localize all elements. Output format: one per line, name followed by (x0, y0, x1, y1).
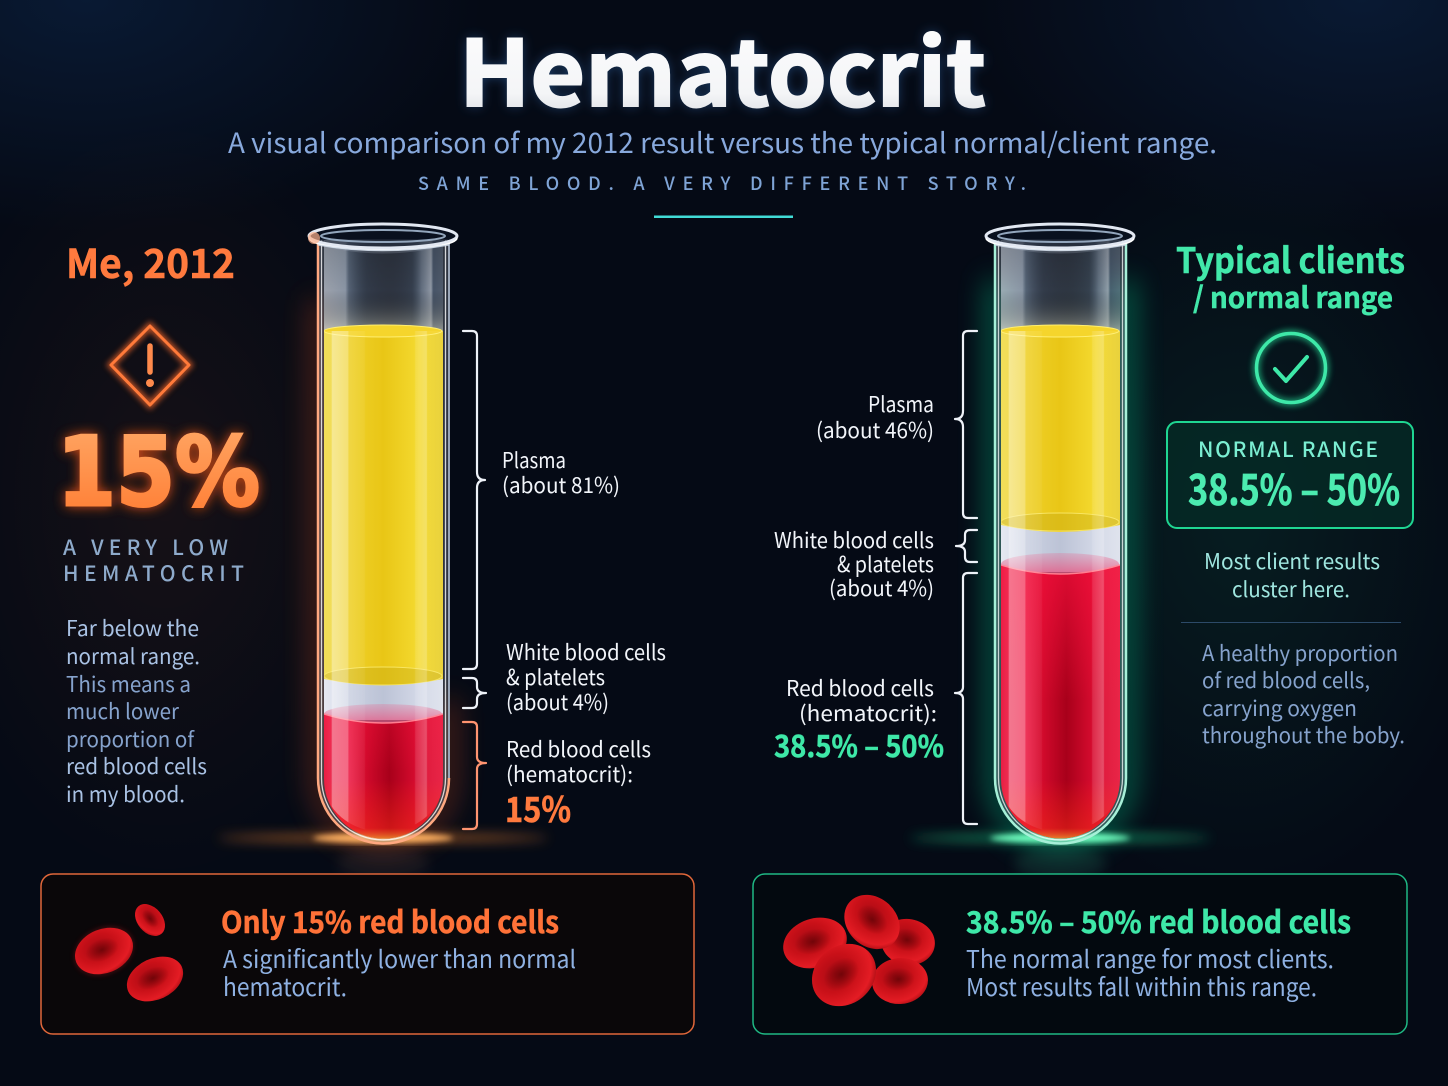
panel text: Most results fall within this range. (966, 969, 1317, 1004)
description: of red blood cells, (1202, 664, 1370, 695)
panel heading: Only 15% red blood cells (221, 898, 559, 942)
bracket: red cells (955, 573, 977, 824)
heading: typical clients: Typical clients (1176, 233, 1405, 284)
description: proportion of (66, 723, 195, 754)
label: red blood cells: Red blood cells (506, 733, 651, 764)
heading: typical clients: / normal range (1193, 275, 1393, 317)
bracket: red cells (463, 722, 486, 829)
label: red blood cells: (hematocrit): (799, 697, 937, 728)
glass interior (1001, 240, 1120, 332)
value: 15 percent: 15% (57, 418, 260, 528)
label: white blood cells (774, 524, 934, 603)
label: white blood cells: (about 4%) (506, 686, 609, 717)
label: white blood cells: White blood cells (506, 636, 666, 667)
label: red blood cells: (hematocrit): (506, 758, 633, 789)
tube rim (308, 224, 457, 254)
panel text: The normal range for most clients. (966, 941, 1334, 976)
bracket: plasma (955, 331, 977, 518)
label: red blood cells (774, 672, 944, 766)
description: A healthy proportion (1202, 637, 1398, 668)
liquid layers (318, 240, 449, 845)
description: throughout the boby. (1202, 719, 1405, 750)
label: white blood cells: White blood cells (774, 524, 934, 555)
panel: only 15 percent (41, 874, 694, 1034)
red cells layer (1001, 565, 1120, 845)
description (66, 612, 207, 809)
label: plasma: Plasma (502, 444, 566, 475)
label: plasma: Plasma (868, 388, 934, 419)
label: white blood cells: (about 4%) (829, 572, 934, 603)
panel text (223, 941, 576, 1004)
description (1202, 637, 1405, 750)
description: carrying oxygen (1202, 692, 1357, 723)
callout: normal range (1167, 422, 1413, 528)
heading: typical clients (1176, 233, 1405, 317)
plasma layer (324, 325, 443, 689)
icon: red blood cells (68, 898, 190, 1010)
icon: red blood cells (777, 884, 939, 1019)
title: Hematocrit (459, 1, 986, 133)
plasma layer (1001, 325, 1120, 535)
label: red blood cells: 38.5% – 50% (774, 722, 944, 766)
tube glow (218, 300, 548, 882)
caption: a very low hematocrit: HEMATOCRIT (63, 558, 244, 588)
heading: me 2012: Me, 2012 (66, 232, 235, 290)
tube rim (986, 224, 1134, 254)
title: Hematocrit (459, 1, 986, 133)
label: white blood cells: & platelets (506, 661, 605, 692)
label: red blood cells (505, 733, 651, 833)
accent line (654, 216, 793, 218)
callout value: 38.5% – 50% (1188, 457, 1400, 518)
bracket: white cells (463, 678, 486, 708)
panel text: A significantly lower than normal (223, 941, 576, 976)
tube glow (910, 280, 1210, 882)
icon: check circle (1256, 334, 1326, 402)
white cells layer (1001, 525, 1120, 575)
label: plasma: (about 46%) (816, 414, 934, 445)
description: red blood cells (66, 750, 207, 781)
label: plasma: (about 81%) (502, 469, 620, 500)
note: cluster here: cluster here. (1232, 573, 1350, 604)
glass highlights (1001, 331, 1120, 841)
glass wall (318, 240, 449, 844)
glass highlights (324, 331, 443, 841)
panel: me 2012 summary (57, 232, 260, 809)
caption: a very low hematocrit (63, 532, 244, 588)
callout label: NORMAL RANGE (1198, 434, 1378, 464)
panel text: hematocrit. (223, 969, 347, 1004)
red cells layer (324, 714, 443, 845)
label: plasma (502, 444, 620, 500)
tagline: SAME BLOOD. A VERY DIFFERENT STORY. (418, 170, 1026, 196)
test tube: me 2012 (218, 224, 548, 882)
value: 15 percent: 15% (57, 418, 260, 528)
label: red blood cells: 15% (505, 782, 571, 833)
white cells layer (324, 679, 443, 724)
test tube: typical clients (910, 224, 1210, 882)
bracket: plasma (463, 331, 485, 669)
caption: a very low hematocrit: A VERY LOW (63, 532, 228, 562)
bracket: white cells (956, 530, 977, 562)
panel text (966, 941, 1334, 1004)
description: normal range. (66, 640, 200, 671)
label: red blood cells: Red blood cells (786, 672, 934, 703)
panel: typical clients summary (1167, 233, 1413, 750)
subtitle: A visual comparison of my 2012 result versus the typical normal/client range. (228, 122, 1217, 162)
panel: normal range (753, 874, 1407, 1034)
panel heading: 38.5% – 50% red blood cells (966, 898, 1351, 942)
description: much lower (66, 695, 180, 726)
description: in my blood. (66, 778, 185, 809)
glass interior (324, 240, 443, 332)
bracket labels: typical clients (955, 331, 977, 824)
label: white blood cells: & platelets (837, 548, 934, 579)
liquid layers (995, 240, 1126, 845)
note: cluster here (1204, 545, 1380, 604)
label: plasma (816, 388, 934, 445)
description: Far below the (66, 612, 199, 643)
glass wall (995, 240, 1126, 844)
note: cluster here: Most client results (1204, 545, 1380, 576)
description: This means a (66, 668, 191, 699)
icon: warning diamond (111, 326, 189, 405)
label: white blood cells (506, 636, 666, 717)
bracket labels: me 2012 (463, 331, 486, 829)
